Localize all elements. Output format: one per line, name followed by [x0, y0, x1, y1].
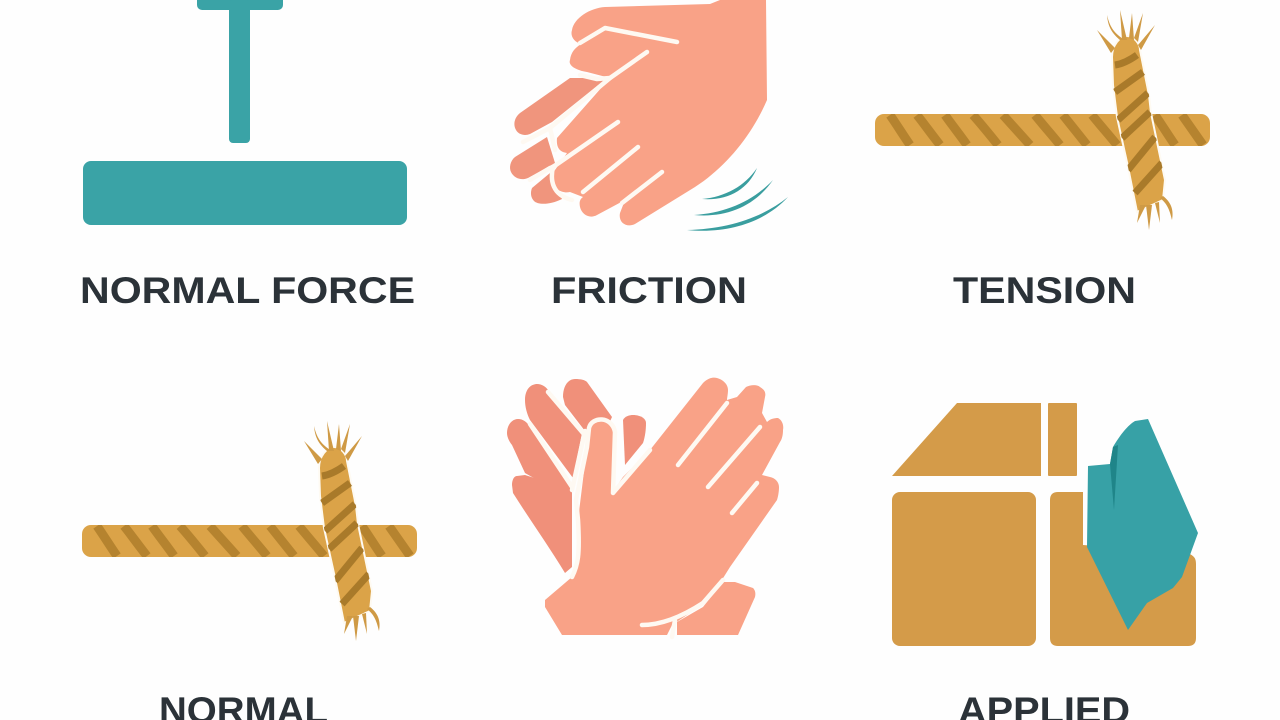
- vertical rope: [1112, 36, 1165, 212]
- box panels: [892, 403, 1196, 646]
- horizontal rope: [875, 114, 1210, 146]
- horizontal rope: [82, 525, 417, 557]
- back fingers: [510, 78, 607, 204]
- label: normal force: NORMAL FORCE: [80, 270, 415, 311]
- icon: tension rope: [875, 10, 1210, 230]
- motion arcs: [687, 168, 788, 231]
- frayed ends: [304, 421, 380, 641]
- front hand: [530, 378, 783, 637]
- palm and front fingers: [552, 0, 767, 225]
- icon: applied force box with teal cloth: [892, 403, 1198, 646]
- vertical rope: [319, 447, 372, 623]
- frayed ends: [1097, 10, 1173, 230]
- outline and finger gaps: [530, 392, 760, 637]
- icon: overlapping hands: [507, 378, 783, 637]
- finger separators: [523, 28, 677, 203]
- icon: friction hand with motion arcs: [510, 0, 788, 231]
- label: tension: TENSION: [953, 270, 1136, 311]
- label: friction: FRICTION: [551, 270, 747, 311]
- teal cloth: [1087, 419, 1198, 630]
- icon: normal rope: [82, 421, 417, 641]
- back hand: [507, 379, 646, 573]
- icon: normal force block and T-shaped arrow: [83, 0, 407, 225]
- cloth fold: [1110, 445, 1118, 510]
